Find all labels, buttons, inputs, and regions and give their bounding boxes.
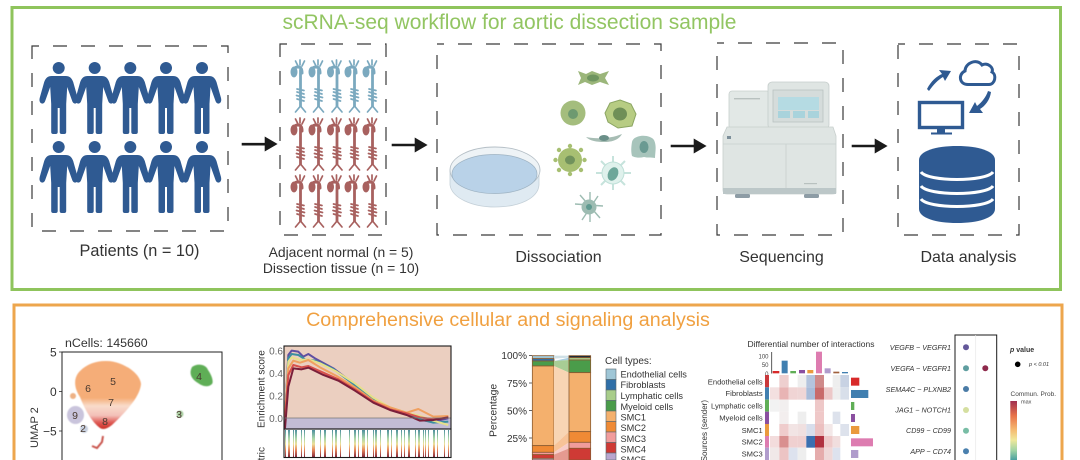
label: dissociation: Dissociation (515, 249, 602, 266)
icon: database (919, 146, 995, 223)
UMAP plot frame (62, 352, 222, 460)
chart: differential interactions heatmap (700, 339, 874, 460)
chart: enrichment plot (256, 346, 451, 460)
dot plot column divider (975, 335, 977, 460)
legend entries: SMC4 (620, 444, 646, 454)
legend entries: Lymphatic cells (620, 391, 683, 401)
heatmap row labels: Fibroblasts (726, 389, 763, 398)
cell: dendritic (596, 156, 631, 190)
step: tissue (263, 44, 419, 276)
p value text: p < 0.01 (1028, 362, 1049, 368)
stacked y ticks: 25% (507, 434, 527, 445)
arrow: tissue to dissociation (392, 138, 427, 152)
enrichment y ticks: 0.6 (269, 346, 283, 358)
icon: sequencer (723, 82, 836, 198)
stacked y ticks (501, 351, 527, 445)
heatmap top axis ticks (758, 354, 769, 378)
dot plot ligand labels: APP − CD74 (909, 447, 951, 456)
icon: petri dish (450, 147, 540, 207)
icon: monitor (920, 102, 962, 134)
cell: bumpy (553, 144, 587, 176)
legend entries: Endothelial cells (620, 370, 687, 380)
cell: small star (575, 192, 603, 222)
heatmap title: Differential number of interactions (748, 339, 874, 349)
legend entries: Fibroblasts (620, 380, 666, 390)
cell: pale green (631, 136, 656, 158)
heatmap row labels: SMC2 (742, 438, 763, 446)
UMAP title: nCells: 145660 (65, 336, 148, 350)
heatmap top axis ticks: 50 (762, 363, 769, 369)
probability title: Commun. Prob. (1010, 391, 1056, 398)
legend: cell types (605, 356, 687, 460)
enrichment y ticks: 0.2 (269, 392, 283, 402)
arrow: sequencing to analysis (852, 139, 887, 153)
right bars (851, 378, 873, 458)
dot plot ligand labels: JAG1 − NOTCH1 (894, 406, 951, 414)
chart: stacked cell type bars (488, 351, 687, 460)
stacked bars (532, 356, 591, 460)
icon: cloud (960, 62, 995, 84)
UMAP cluster numbers: 2 (80, 423, 86, 435)
enrichment positive background (284, 346, 451, 418)
enrichment y ticks (269, 346, 283, 425)
dashed frame: data analysis (898, 44, 1019, 235)
UMAP cluster numbers: 9 (72, 410, 78, 422)
icon: download arrow (969, 91, 991, 113)
legend entries: SMC2 (620, 423, 646, 433)
label: data analysis: Data analysis (920, 249, 1017, 266)
enrichment frame (284, 346, 451, 429)
cell: elongated (586, 134, 622, 142)
sender color strip (765, 375, 769, 460)
UMAP cluster numbers: 3 (176, 409, 182, 421)
dashed frame: patients (32, 46, 228, 231)
dot plot dots (963, 344, 988, 454)
barcode panel frame (284, 429, 451, 458)
UMAP cluster numbers: 6 (85, 383, 91, 395)
enrichment zero line (284, 417, 451, 419)
icon: upload arrow (927, 70, 951, 91)
UMAP axis ticks: −5 (43, 424, 57, 438)
dashed frame: dissociation (437, 44, 661, 235)
dot plot frame (955, 335, 997, 460)
UMAP axis ticks (43, 346, 57, 438)
top bars (773, 352, 848, 373)
legend entries: SMC3 (620, 434, 646, 444)
p value title: p value (1009, 347, 1034, 354)
step: dissociation (437, 44, 661, 266)
label: tissue: Adjacent normal (n = 5) (269, 244, 413, 260)
panel: scRNA-seq workflow (12, 8, 1060, 290)
enrichment y ticks: 0.0 (269, 414, 283, 425)
legend entries: Myeloid cells (620, 402, 673, 412)
label: dissection tissue: Dissection tissue (n = 10) (263, 260, 419, 276)
enrichment negative background (284, 418, 451, 429)
probability gradient bar (1010, 401, 1017, 460)
dot plot ligand labels: CD99 − CD99 (906, 426, 951, 435)
heatmap row labels: Endothelial cells (708, 378, 763, 386)
stacked y axis label: Percentage (488, 384, 500, 437)
gene rank barcode (285, 430, 450, 457)
dot plot ligand labels: VEGFA − VEGFR1 (890, 364, 951, 373)
UMAP axis ticks: 0 (50, 385, 57, 399)
probability max label: max (1021, 400, 1032, 406)
heatmap top axis ticks: 0 (765, 372, 769, 378)
UMAP cluster numbers: 4 (196, 371, 202, 383)
legend entries (620, 370, 687, 460)
chart: ligand receptor dot plot (886, 335, 1056, 460)
stacked y ticks: 50% (507, 406, 527, 418)
UMAP clusters (67, 361, 213, 448)
step: sequencing (717, 43, 843, 266)
arrow: dissociation to sequencing (671, 139, 706, 153)
cell: large (605, 100, 636, 128)
heatmap y axis label: Sources (sender) (700, 400, 709, 460)
heatmap cells (770, 375, 849, 460)
p value dot (1015, 362, 1020, 367)
UMAP axis ticks: 5 (50, 346, 57, 360)
dashed frame: sequencing (717, 43, 843, 235)
UMAP cluster numbers: 8 (102, 416, 108, 428)
legend title: Cell types: (605, 356, 652, 367)
workflow panel border (12, 8, 1060, 290)
cell: flat (578, 71, 609, 85)
stacked tick marks (529, 356, 532, 438)
heatmap row labels: Myeloid cells (719, 414, 763, 422)
heading: analysis: Comprehensive cellular and signaling analysis (306, 309, 710, 331)
icon group: ten patients (39, 62, 221, 213)
UMAP tick marks (59, 352, 62, 431)
icon group: adjacent normal aortas (290, 60, 378, 112)
panel: cellular and signaling analysis (14, 305, 1062, 460)
enrichment curves (285, 351, 448, 428)
heatmap row labels: Lymphatic cells (711, 402, 763, 410)
enrichment y ticks: 0.4 (269, 369, 283, 380)
dashed frame: tissue (280, 44, 386, 235)
enrichment y axis label: Enrichment score (256, 350, 268, 428)
heatmap row labels: SMC1 (742, 426, 763, 435)
heatmap row labels: SMC3 (742, 450, 763, 458)
UMAP axis label: UMAP 2 (29, 407, 41, 448)
step: data analysis (898, 44, 1019, 266)
label: sequencing: Sequencing (739, 249, 824, 266)
dot plot ligand labels (886, 343, 951, 456)
label: patients: Patients (n = 10) (80, 242, 199, 260)
cell: round (560, 100, 586, 126)
stacked y ticks: 100% (501, 351, 527, 362)
icon group: dissection aortas (290, 118, 378, 227)
dot plot ligand labels: SEMA4C − PLXNB2 (886, 385, 951, 394)
dot plot ligand labels: VEGFB − VEGFR1 (890, 343, 951, 352)
step: patients (32, 46, 228, 260)
UMAP cluster numbers: 5 (110, 376, 116, 388)
heatmap top axis line (771, 352, 773, 374)
heatmap top axis ticks: 100 (758, 354, 769, 360)
chart: UMAP (29, 336, 222, 460)
arrow: patients to tissue (242, 137, 277, 151)
heatmap row labels (708, 378, 763, 458)
legend entries: SMC1 (620, 412, 646, 422)
UMAP cluster numbers: 7 (108, 397, 114, 409)
UMAP cluster numbers (72, 371, 202, 435)
icon group: dissociated cells (553, 71, 656, 222)
legend: communication probability (1010, 391, 1056, 460)
stacked y ticks: 75% (507, 379, 527, 390)
heading: workflow: scRNA-seq workflow for aortic dissection sample (283, 11, 736, 34)
legend: p value (1009, 347, 1049, 368)
legend swatches (606, 369, 616, 460)
heatmap drawing (765, 352, 873, 460)
analysis panel border (14, 305, 1062, 460)
